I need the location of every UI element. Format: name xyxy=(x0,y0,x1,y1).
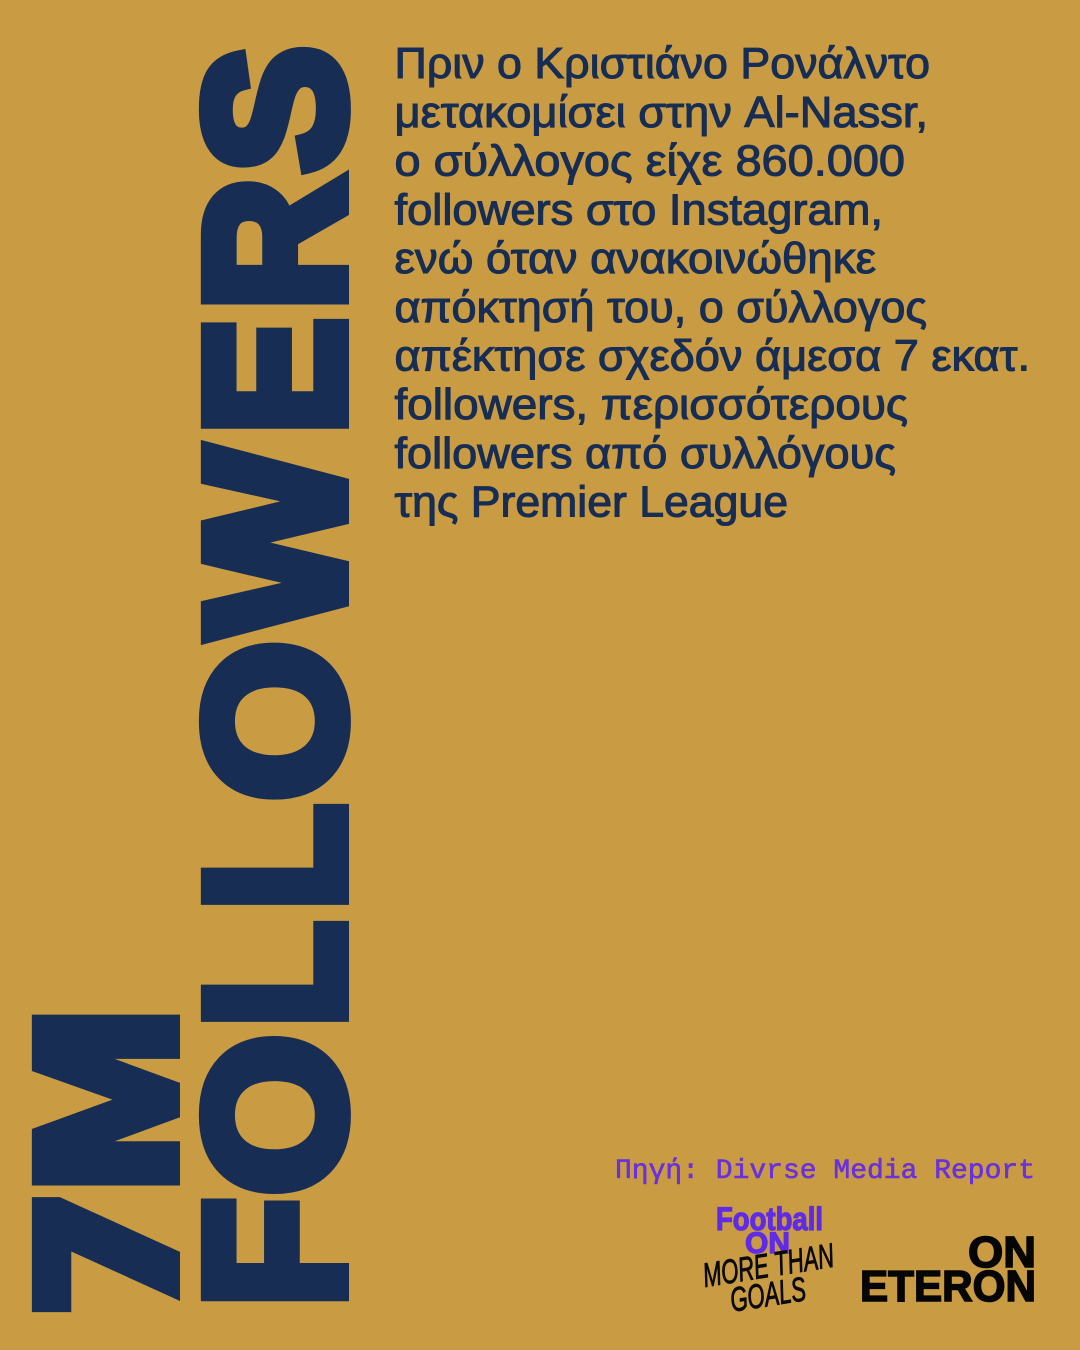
logo wordmark: Football ON xyxy=(716,1201,823,1260)
source credit: Πηγή: Divrse Media Report xyxy=(615,1156,1035,1187)
logo wordmark: Football ON: ON xyxy=(745,1227,790,1260)
vertical heading: FOLLOWERS: E xyxy=(167,318,384,434)
logo tagline: More Than Goals xyxy=(700,1237,837,1320)
logo tagline: More Than Goals: MORE THAN xyxy=(700,1237,837,1295)
vertical heading: FOLLOWERS: O xyxy=(166,641,384,801)
vertical heading: FOLLOWERS: W xyxy=(166,449,384,636)
body paragraph: μετακομίσει στην Al-Nassr, xyxy=(394,89,928,137)
vertical heading: FOLLOWERS: S xyxy=(165,46,384,172)
body paragraph: απόκτησή του, ο σύλλογος xyxy=(394,284,927,332)
vertical heading: 7M: 7 xyxy=(3,1189,217,1318)
body paragraph: Πριν ο Κριστιάνο Ρονάλντο xyxy=(394,40,930,88)
logo wordmark: Football ON: Football xyxy=(716,1201,823,1237)
vertical heading: FOLLOWERS: O xyxy=(165,1035,384,1195)
body paragraph: απέκτησε σχεδόν άμεσα 7 εκατ. xyxy=(394,332,1030,380)
body paragraph: της Premier League xyxy=(394,478,788,526)
vertical heading: FOLLOWERS: R xyxy=(167,178,384,310)
vertical heading: FOLLOWERS xyxy=(165,46,384,1307)
vertical heading: 7M xyxy=(0,1008,217,1318)
body paragraph: ο σύλλογος είχε 860.000 xyxy=(394,138,905,186)
logo: On Eteron: ON xyxy=(968,1228,1036,1277)
logo: On Eteron: ETERON xyxy=(860,1262,1036,1311)
logo tagline: More Than Goals: GOALS xyxy=(727,1270,809,1320)
vertical heading: FOLLOWERS: F xyxy=(165,1198,384,1307)
body paragraph: ενώ όταν ανακοινώθηκε xyxy=(394,235,876,283)
vertical heading: FOLLOWERS: L xyxy=(166,922,384,1027)
body paragraph: followers από συλλόγους xyxy=(394,430,896,478)
logo: Football ON More Than Goals xyxy=(700,1201,837,1320)
logo: On Eteron xyxy=(860,1228,1036,1311)
body paragraph: followers, περισσότερους xyxy=(394,381,908,429)
body paragraph: followers στο Instagram, xyxy=(394,186,883,234)
body paragraph xyxy=(394,40,1030,526)
vertical heading: 7M: M xyxy=(0,1008,215,1192)
vertical heading: FOLLOWERS: L xyxy=(166,805,384,910)
